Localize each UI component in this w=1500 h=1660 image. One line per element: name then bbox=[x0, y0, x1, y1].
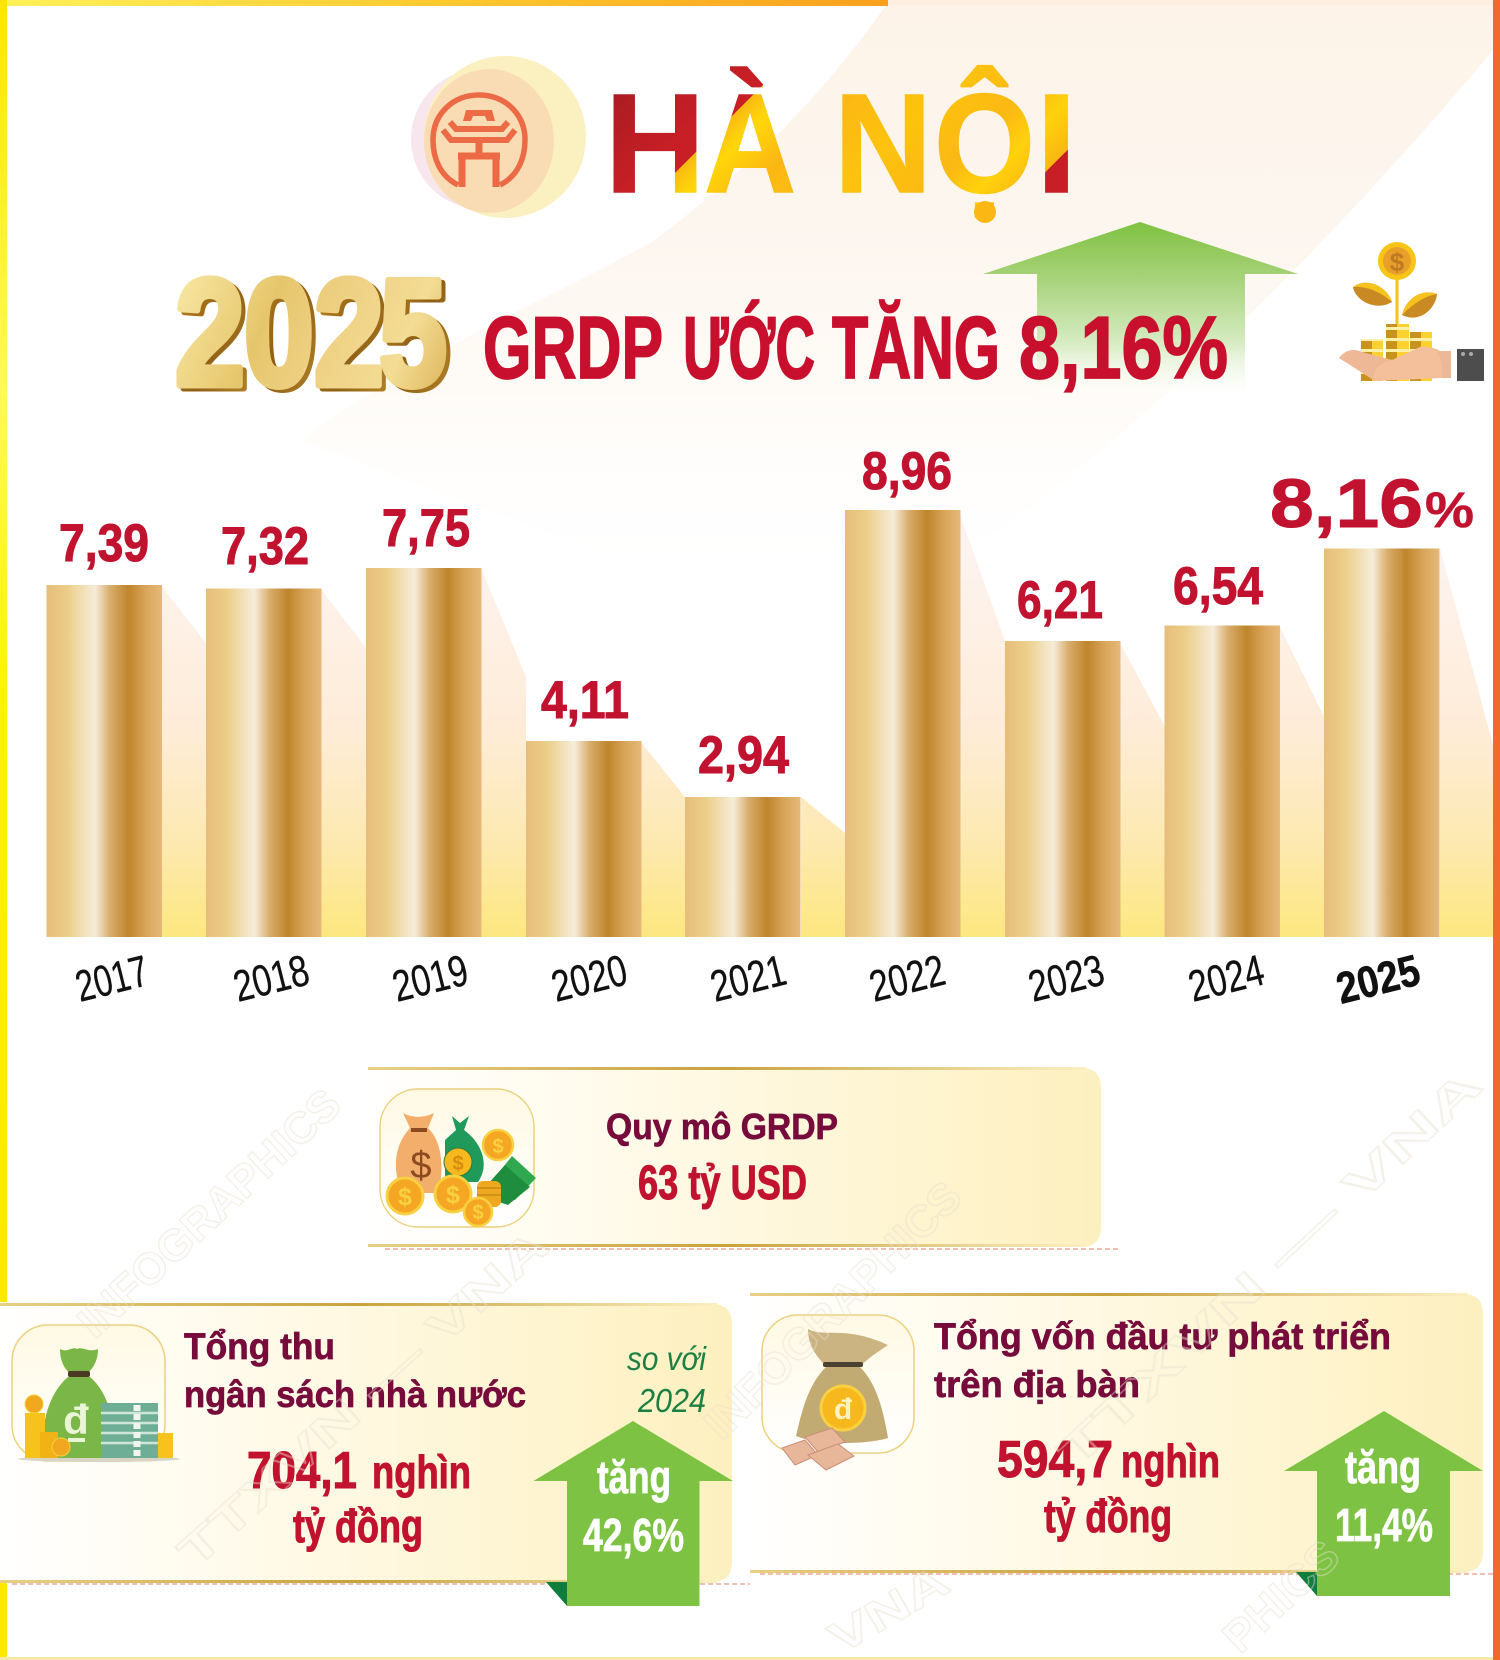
label: state budget revenue bbox=[184, 1326, 526, 1415]
chart long shadows bbox=[162, 515, 1493, 937]
year axis labels: 2023 bbox=[1024, 946, 1109, 1012]
year axis labels: 2017 bbox=[71, 946, 153, 1012]
icon: coin plant in hand: $ bbox=[1390, 247, 1405, 277]
bar values: 6,54 bbox=[1173, 557, 1263, 616]
heading year 2025 gold: 0 bbox=[244, 248, 314, 418]
panel: development investment bbox=[750, 1293, 1493, 1596]
heading year 2025 gold: 0 bbox=[248, 251, 318, 421]
arrow: growth green background bbox=[983, 222, 1298, 397]
icon: money bags and coins: $ bbox=[398, 1183, 412, 1211]
heading year 2025 gold: 5 bbox=[379, 248, 447, 418]
heading year 2025 gold bbox=[175, 248, 451, 421]
watermarks: TTXVN — VNA bbox=[169, 1220, 558, 1577]
icon: money bags and coins bbox=[380, 1089, 536, 1227]
panel: GRDP scale bbox=[368, 1067, 1118, 1249]
watermarks: INFOGRAPHICS bbox=[68, 1080, 350, 1347]
year axis labels: 2020 bbox=[547, 946, 632, 1012]
label: GRDP scale: Quy mô GRDP bbox=[606, 1106, 838, 1147]
value: 704,1 thousand billion: tỷ đồng bbox=[293, 1500, 423, 1552]
icon: Hanoi emblem bbox=[411, 56, 586, 218]
note: compared with 2024 bbox=[627, 1340, 707, 1419]
arrow: up 11,4%: tăng bbox=[1345, 1441, 1421, 1493]
value: 594,7 thousand billion: 594,7 bbox=[997, 1431, 1113, 1489]
heading year 2025 gold: 5 bbox=[383, 251, 451, 421]
title: Hà Nội bbox=[605, 64, 1077, 223]
bar values: 2,94 bbox=[698, 726, 789, 785]
value: 63 billion USD: 63 tỷ USD bbox=[638, 1157, 807, 1210]
icon: money bags and coins: $ bbox=[410, 1145, 432, 1187]
icon: tan money sack: đ bbox=[834, 1393, 853, 1426]
label: state budget revenue: Tổng thu bbox=[184, 1326, 335, 1367]
title: Hà Nội: H bbox=[605, 64, 705, 222]
watermarks bbox=[68, 1060, 1491, 1660]
heading year 2025 gold: 2 bbox=[318, 251, 388, 421]
year axis labels bbox=[71, 946, 1425, 1014]
icon: money bags and coins: $ bbox=[446, 1181, 460, 1209]
note: compared with 2024: 2024 bbox=[637, 1382, 706, 1419]
title: Hà Nội: À bbox=[704, 64, 796, 222]
bar values: 6,21 bbox=[1017, 571, 1103, 630]
year axis labels: 2018 bbox=[229, 946, 314, 1012]
year axis labels: 2019 bbox=[388, 946, 473, 1012]
note: compared with 2024: so với bbox=[627, 1340, 707, 1377]
value: 594,7 thousand billion: tỷ đồng bbox=[1044, 1490, 1172, 1542]
watermarks: INFOGRAPHICS bbox=[694, 1172, 972, 1449]
bar values bbox=[59, 442, 1474, 785]
label: state budget revenue: ngân sách nhà nước bbox=[184, 1374, 526, 1415]
title: Hà Nội: Ộ bbox=[934, 64, 1035, 222]
bar values: % bbox=[1425, 482, 1474, 538]
title: Hà Nội: N bbox=[834, 64, 932, 222]
bar values: 7,75 bbox=[382, 499, 470, 558]
icon: money bags and coins: $ bbox=[452, 1153, 464, 1175]
heading: GRDP growth: TĂNG bbox=[832, 298, 1000, 397]
icon: tan money sack bbox=[762, 1315, 914, 1470]
heading: GRDP growth: ƯỚC bbox=[683, 298, 815, 397]
label: development investment: trên địa bàn bbox=[934, 1364, 1140, 1405]
bar values: 8,96 bbox=[862, 442, 952, 501]
icon: money bags and coins: $ bbox=[472, 1202, 484, 1224]
bar values: 8,16 bbox=[1270, 465, 1423, 542]
panel: state budget revenue bbox=[0, 1303, 750, 1606]
arrow: up 42,6%: tăng bbox=[597, 1451, 671, 1503]
icon: money bags and coins: $ bbox=[492, 1136, 504, 1158]
year axis labels: 2024 bbox=[1184, 946, 1269, 1012]
heading year 2025 gold: 2 bbox=[314, 248, 384, 418]
label: development investment bbox=[934, 1316, 1391, 1405]
arrow: up 42,6% bbox=[534, 1421, 733, 1606]
value: 704,1 thousand billion: nghìn bbox=[372, 1446, 471, 1498]
bar chart: GRDP growth 2017-2025 bbox=[46, 442, 1493, 1014]
value: 594,7 thousand billion: nghìn bbox=[1121, 1435, 1220, 1487]
value: 704,1 thousand billion bbox=[247, 1442, 471, 1552]
label: development investment: Tổng vốn đầu tư phát triển bbox=[934, 1316, 1391, 1357]
heading: GRDP growth: GRDP bbox=[483, 298, 663, 397]
heading year 2025 gold: 2 bbox=[175, 248, 245, 418]
year axis labels: 2022 bbox=[865, 946, 950, 1012]
heading year 2025 gold: 2 bbox=[179, 251, 249, 421]
watermarks: PHICS bbox=[1213, 1531, 1349, 1660]
bar values: 7,32 bbox=[221, 517, 309, 576]
arrow: up 11,4%: 11,4% bbox=[1335, 1499, 1433, 1551]
bars bbox=[46, 510, 1440, 937]
watermarks: TTXVN — VNA bbox=[1048, 1060, 1491, 1477]
bar values: 7,39 bbox=[59, 514, 149, 573]
arrow: up 42,6%: 42,6% bbox=[583, 1509, 684, 1561]
heading: GRDP growth bbox=[483, 298, 1228, 397]
year axis labels: 2025 bbox=[1332, 946, 1425, 1014]
value: 704,1 thousand billion: 704,1 bbox=[247, 1442, 357, 1500]
bar values: 4,11 bbox=[541, 671, 629, 730]
icon: green money bag bbox=[12, 1325, 180, 1462]
heading: GRDP growth: 8,16% bbox=[1019, 298, 1228, 397]
arrow: up 11,4% bbox=[1284, 1411, 1483, 1596]
year axis labels: 2021 bbox=[706, 946, 791, 1012]
title: Hà Nội: I bbox=[1036, 64, 1077, 222]
icon: green money bag: đ bbox=[63, 1396, 89, 1443]
value: 594,7 thousand billion bbox=[997, 1431, 1220, 1542]
icon: coin plant in hand bbox=[1339, 242, 1484, 381]
